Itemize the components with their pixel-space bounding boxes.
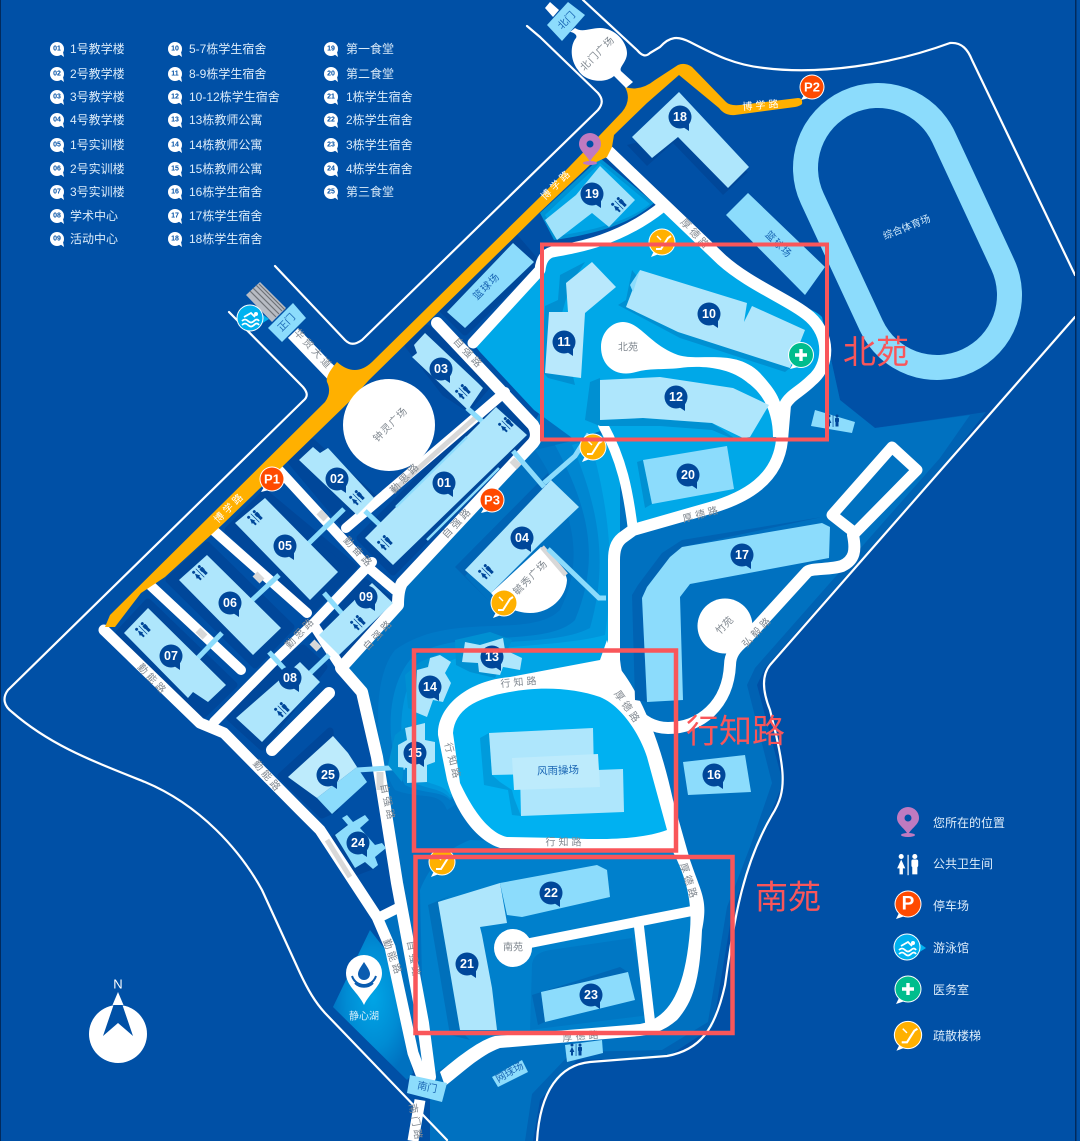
plaza: zhongling bbox=[343, 379, 435, 471]
legend: numbered buildings: 16 bbox=[171, 188, 179, 196]
road: connector between roads bbox=[380, 907, 400, 917]
building 01 bbox=[365, 407, 527, 565]
road: white bar beside 08 bbox=[272, 693, 329, 750]
legend: numbered buildings: 12 bbox=[171, 94, 179, 100]
legend: numbered buildings: 17 bbox=[171, 212, 179, 220]
label bubble 18: 18 bbox=[673, 110, 687, 124]
label bubble 07: 07 bbox=[164, 649, 178, 663]
legend: map symbols: 医务室 bbox=[933, 982, 969, 997]
legend: numbered buildings: 16栋学生宿舍 bbox=[189, 184, 262, 199]
gate: south gate: 南门 bbox=[416, 1079, 438, 1095]
road: qinsi lower bbox=[214, 562, 372, 722]
legend: numbered buildings: 活动中心 bbox=[70, 231, 118, 246]
icon: stairs yuxiu bbox=[490, 590, 518, 618]
panel: court 19 inner bbox=[545, 163, 650, 236]
road: east thin boundary bbox=[537, 317, 1075, 1141]
building 12 bbox=[600, 377, 769, 438]
compass: N bbox=[113, 976, 123, 992]
building: east toilets bbox=[811, 410, 855, 433]
building 03 bbox=[412, 333, 483, 410]
legend: numbered buildings: 24 bbox=[327, 166, 335, 172]
plaza: zhongling: 钟灵广场 bbox=[370, 404, 410, 444]
pad: building 05 bbox=[228, 493, 354, 609]
label bubble 09: 09 bbox=[359, 590, 373, 604]
panel: band between roads bbox=[383, 912, 428, 1075]
road: huamao avenue bbox=[293, 333, 340, 382]
label bubble 21 bbox=[456, 952, 478, 978]
panel: lake ground bbox=[333, 930, 413, 1080]
label bubble 09 bbox=[354, 586, 378, 611]
legend: numbered buildings: 4号教学楼 bbox=[70, 112, 125, 127]
plaza: yuxiu: 毓秀广场 bbox=[510, 557, 550, 597]
icon: parking P3: P3 bbox=[484, 492, 500, 508]
panel: south block ground bbox=[420, 840, 700, 1075]
label bubble 16 bbox=[702, 764, 726, 789]
shadow: rain field hall bbox=[480, 733, 521, 816]
icon: parking P2: P2 bbox=[804, 80, 820, 94]
legend: numbered buildings: 1栋学生宿舍 bbox=[346, 89, 413, 104]
road labels: 自强路 bbox=[378, 782, 398, 823]
legend: numbered buildings: 10 bbox=[171, 46, 179, 52]
legend: map symbols: P bbox=[902, 894, 915, 914]
label bubble 08: 08 bbox=[283, 671, 297, 685]
label bubble 06: 06 bbox=[223, 596, 237, 610]
legend: numbered buildings: 09 bbox=[53, 236, 61, 242]
label bubble 07 bbox=[160, 644, 182, 670]
building 17 bbox=[642, 523, 830, 702]
road: qinsi upper bbox=[346, 392, 505, 528]
building 22 bbox=[500, 865, 610, 917]
label bubble 03: 03 bbox=[434, 362, 448, 376]
panel: ground contour 1 bbox=[378, 430, 620, 810]
road: qinneng road bbox=[104, 630, 422, 1077]
shadow: building 12 bbox=[585, 378, 740, 442]
road: boxue orange road bbox=[105, 64, 802, 627]
legend: numbered buildings: 第二食堂 bbox=[346, 66, 394, 81]
label bubble 05 bbox=[274, 534, 296, 560]
road surface strips bbox=[198, 460, 519, 790]
road: xingzhi ring and houde road bbox=[438, 640, 704, 1086]
pad: building 18 bbox=[627, 132, 748, 195]
legend: numbered buildings: 3号教学楼 bbox=[70, 89, 125, 104]
building: rain field hall: 风雨操场 bbox=[537, 763, 579, 778]
icon: parking P3 bbox=[480, 488, 504, 513]
plaza: north gate: 北门广场 bbox=[577, 33, 617, 73]
gate: main gate bbox=[246, 282, 306, 342]
gate: north gate: 北门 bbox=[555, 9, 578, 32]
legend: numbered buildings: 07 bbox=[53, 188, 61, 196]
court: sports field: 篮球场 bbox=[762, 228, 795, 261]
label bubble 15: 15 bbox=[408, 746, 422, 760]
label bubble 24 bbox=[346, 832, 370, 857]
icon: parking P1 bbox=[260, 466, 284, 492]
road labels: 自强路 bbox=[360, 616, 396, 653]
label bubble 25 bbox=[316, 764, 340, 789]
road: 19 arc bbox=[473, 207, 662, 343]
road labels: 自强路 bbox=[451, 335, 487, 372]
label bubble 16: 16 bbox=[707, 768, 721, 782]
gate: main gate: 正门 bbox=[275, 311, 298, 334]
icon: stairs south bbox=[428, 848, 456, 877]
panel: ground contour 4 bbox=[413, 430, 620, 795]
court: tennis: 网球场 bbox=[493, 1059, 526, 1085]
label bubble 17: 17 bbox=[735, 548, 749, 562]
road: south vertical drive bbox=[638, 918, 651, 1030]
legend: numbered buildings: 2号教学楼 bbox=[70, 66, 125, 81]
legend: numbered buildings: 03 bbox=[53, 94, 61, 100]
label bubble 18 bbox=[668, 106, 692, 131]
label bubble 04: 04 bbox=[515, 531, 529, 545]
building 21 bbox=[438, 883, 507, 1030]
plaza: yuxiu bbox=[491, 547, 567, 613]
shadow: buildings 13 14 15 bbox=[388, 632, 512, 782]
shadow: building 11 bbox=[541, 262, 585, 385]
legend: numbered buildings: 学术中心 bbox=[70, 208, 118, 223]
label bubble 13: 13 bbox=[485, 650, 499, 664]
label bubble 02 bbox=[326, 468, 348, 493]
shadow: building 10 bbox=[618, 270, 790, 372]
legend: numbered buildings: 15栋教师公寓 bbox=[189, 161, 262, 176]
label bubble 17 bbox=[730, 544, 754, 569]
legend: numbered buildings: 08 bbox=[53, 212, 61, 220]
panel: ground around 23 bbox=[530, 938, 650, 1030]
road: south gate road bbox=[413, 1100, 420, 1141]
label bubble 22: 22 bbox=[544, 886, 558, 900]
legend: numbered buildings: 11 bbox=[171, 70, 179, 78]
panel: north court bbox=[473, 207, 829, 530]
icon: lake pin: 静心湖 bbox=[349, 1010, 379, 1022]
callout: south label: 南苑 bbox=[755, 878, 821, 916]
building: rain field hall bbox=[489, 728, 624, 816]
court: basketball bbox=[447, 243, 534, 328]
callout: xingzhi zone box bbox=[414, 650, 676, 850]
building 08 bbox=[236, 662, 320, 742]
legend: numbered buildings: 3栋学生宿舍 bbox=[346, 137, 413, 152]
road surface strip along qinneng bbox=[327, 840, 350, 877]
building 09 bbox=[319, 583, 393, 655]
plaza: nanyuan: 南苑 bbox=[503, 940, 523, 954]
road surface strip along qinsi bbox=[392, 418, 475, 492]
label bubble 19 bbox=[580, 182, 604, 208]
label bubble 23 bbox=[580, 984, 602, 1009]
pad: building 02 bbox=[290, 442, 374, 522]
label bubble 02: 02 bbox=[330, 472, 344, 486]
pad: building 07 bbox=[119, 602, 234, 715]
legend: numbered buildings: 25 bbox=[327, 188, 335, 196]
label bubble 20: 20 bbox=[681, 468, 695, 482]
road labels: 厚德路 bbox=[562, 1028, 602, 1044]
icon: clinic bbox=[788, 342, 814, 369]
building 16 bbox=[683, 755, 751, 795]
label bubble 19: 19 bbox=[585, 187, 599, 201]
label bubble 11: 11 bbox=[557, 335, 571, 349]
road: north thin boundary bbox=[583, 0, 1075, 275]
road labels: 行知路 bbox=[442, 741, 464, 782]
label bubble 24: 24 bbox=[351, 836, 365, 850]
building 10 bbox=[626, 270, 805, 368]
legend: numbered buildings: 3号实训楼 bbox=[70, 184, 125, 199]
label bubble 01: 01 bbox=[437, 476, 451, 490]
road labels: 厚德路 bbox=[677, 861, 701, 902]
plaza: zhuyuan bbox=[698, 598, 752, 654]
panel: ground contour 3 bbox=[401, 430, 620, 798]
building 24 bbox=[335, 815, 386, 869]
building: south toilets bbox=[565, 1040, 603, 1062]
gate: south gate bbox=[407, 1075, 447, 1102]
road labels: 博学路 bbox=[211, 489, 248, 526]
legend: numbered buildings: 5-7栋学生宿舍 bbox=[189, 41, 266, 56]
legend: map symbols bbox=[894, 807, 1005, 1051]
building 06 bbox=[179, 555, 281, 655]
label bubble 21: 21 bbox=[460, 957, 474, 971]
legend: numbered buildings: 06 bbox=[53, 166, 61, 172]
court: basketball: 篮球场 bbox=[470, 270, 503, 303]
legend: numbered buildings: 04 bbox=[53, 116, 61, 124]
building 15 bbox=[398, 723, 435, 783]
legend: numbered buildings: 05 bbox=[53, 142, 61, 148]
legend: numbered buildings: 14栋教师公寓 bbox=[189, 137, 262, 152]
callout: xingzhi label: 行知路 bbox=[686, 712, 785, 750]
road: qinfen road bbox=[278, 469, 395, 590]
pad: building 01 bbox=[360, 402, 530, 572]
road: link to building 12 west bbox=[603, 425, 633, 530]
building 07 bbox=[124, 608, 226, 702]
label bubble 15 bbox=[404, 742, 426, 767]
plaza: beiyuan label: 北苑 bbox=[618, 340, 638, 354]
legend: numbered buildings: 21 bbox=[327, 94, 335, 100]
road: between 05 and 06 bbox=[212, 529, 307, 613]
road labels: 勤能路 bbox=[380, 937, 406, 978]
panel: east campus ground bbox=[341, 300, 986, 1141]
road labels: 厚德路 bbox=[681, 503, 722, 525]
label bubble 01 bbox=[432, 472, 456, 497]
gate: north gate bbox=[547, 2, 585, 41]
legend: numbered buildings: 2栋学生宿舍 bbox=[346, 112, 413, 127]
building 11 bbox=[545, 262, 616, 378]
legend: numbered buildings: 第一食堂 bbox=[346, 41, 394, 56]
icon: swimming pool bbox=[236, 304, 269, 332]
building 20 shadow bbox=[637, 460, 652, 508]
legend: numbered buildings: 02 bbox=[53, 70, 61, 78]
building 13 bbox=[462, 638, 522, 675]
building 14 bbox=[415, 655, 451, 717]
callout: north zone box bbox=[542, 244, 827, 440]
legend: map symbols: 停车场 bbox=[933, 898, 969, 913]
callout: south zone box bbox=[416, 857, 732, 1033]
icon: parking P1: P1 bbox=[264, 472, 280, 486]
pad: building 09 bbox=[316, 582, 394, 658]
pad: building 24 bbox=[335, 828, 372, 872]
road labels: 弘毅路 bbox=[739, 613, 775, 650]
road: beiyuan plaza and drive bbox=[601, 322, 785, 437]
road labels bbox=[135, 97, 782, 1141]
road labels: 勤能路 bbox=[135, 661, 171, 698]
building 20 bbox=[643, 446, 734, 504]
building 17 shadow bbox=[632, 517, 822, 702]
label bubble 05: 05 bbox=[278, 539, 292, 553]
plaza: zhuyuan: 竹苑 bbox=[713, 614, 736, 637]
legend: numbered buildings: 17栋学生宿舍 bbox=[189, 208, 262, 223]
plaza: nanyuan bbox=[494, 929, 532, 967]
legend: numbered buildings: 01 bbox=[53, 46, 61, 52]
legend: numbered buildings: 14 bbox=[171, 142, 179, 148]
pad: building 08 bbox=[230, 648, 324, 747]
road: ziqiang road bbox=[341, 323, 536, 1077]
athletic track bbox=[878, 168, 937, 295]
pad: building 06 bbox=[169, 545, 291, 665]
road: ring interior bbox=[453, 689, 667, 839]
road labels: 勤思路 bbox=[282, 614, 318, 651]
panel: ground contour 2 bbox=[391, 430, 620, 800]
building 23 bbox=[541, 972, 635, 1022]
building 25 bbox=[288, 736, 367, 814]
road labels: 自强路 bbox=[404, 939, 424, 980]
link bridges bbox=[195, 408, 606, 770]
label bubble 23: 23 bbox=[584, 988, 598, 1002]
legend: numbered buildings: 20 bbox=[327, 70, 335, 78]
label bubble 08 bbox=[278, 666, 302, 692]
road: north gate stub bbox=[545, 2, 559, 17]
pad: basketball court bbox=[443, 235, 536, 332]
label bubble 25: 25 bbox=[321, 768, 335, 782]
legend: numbered buildings: 13 bbox=[171, 116, 179, 124]
legend: numbered buildings: 18 bbox=[171, 236, 179, 242]
road labels: 华贸大道 bbox=[291, 326, 336, 373]
building 18 bbox=[632, 92, 749, 188]
legend: numbered buildings: 18栋学生宿舍 bbox=[189, 231, 262, 246]
legend: numbered buildings: 15 bbox=[171, 166, 179, 172]
label bubble 12: 12 bbox=[669, 390, 683, 404]
road labels: 厚德路 bbox=[611, 688, 644, 727]
legend: numbered buildings bbox=[50, 41, 413, 247]
building 19 bbox=[545, 166, 635, 240]
label bubble 11 bbox=[552, 330, 576, 356]
plaza: north gate bbox=[570, 28, 633, 88]
icon: parking P2 bbox=[800, 74, 824, 100]
icon: lake pin bbox=[346, 955, 382, 1022]
road: hongyi loop bbox=[832, 447, 917, 533]
label bubble 12 bbox=[664, 386, 688, 411]
road labels: 厚德路 bbox=[678, 216, 714, 253]
legend: map symbols: 公共卫生间 bbox=[933, 857, 993, 871]
legend: numbered buildings: 8-9栋学生宿舍 bbox=[189, 66, 266, 81]
shadow: building 21 bbox=[428, 895, 470, 1040]
legend: map symbols: 您所在的位置 bbox=[933, 815, 1005, 830]
legend: numbered buildings: 22 bbox=[327, 116, 335, 124]
toilet icons on buildings bbox=[134, 196, 627, 719]
pad: building 25 bbox=[281, 731, 335, 815]
icon: location pin bbox=[579, 133, 601, 165]
legend: map symbols: 疏散楼梯 bbox=[933, 1028, 981, 1043]
road labels: 勤奋路 bbox=[341, 534, 377, 571]
pad: building 03 bbox=[408, 328, 488, 408]
legend: numbered buildings: 1号实训楼 bbox=[70, 137, 125, 152]
pad: building 04 bbox=[455, 473, 551, 602]
road labels: 博学路 bbox=[742, 97, 782, 113]
label bubble 04 bbox=[510, 526, 534, 552]
legend: map symbols: 游泳馆 bbox=[933, 940, 969, 955]
athletic track: 综合体育场 bbox=[881, 212, 932, 242]
legend: numbered buildings: 13栋教师公寓 bbox=[189, 112, 262, 127]
label bubble 06 bbox=[218, 592, 242, 617]
road labels: 行知路 bbox=[500, 674, 540, 690]
label bubble 14: 14 bbox=[423, 680, 437, 694]
label bubble 22 bbox=[540, 882, 562, 907]
legend: numbered buildings: 10-12栋学生宿舍 bbox=[189, 89, 280, 104]
callout: north label: 北苑 bbox=[843, 334, 909, 370]
road: link to 08 junction bbox=[313, 624, 341, 667]
icon: stairs north bbox=[648, 228, 676, 257]
legend: numbered buildings: 23 bbox=[327, 142, 335, 148]
legend: numbered buildings: 4栋学生宿舍 bbox=[346, 161, 413, 176]
label bubble 13 bbox=[480, 646, 504, 671]
label bubble 20 bbox=[676, 464, 700, 489]
label bubble 10 bbox=[698, 302, 720, 328]
label bubble 14 bbox=[418, 676, 442, 701]
legend: numbered buildings: 2号实训楼 bbox=[70, 161, 125, 176]
road: west thin boundary bbox=[5, 312, 447, 1140]
panel: court 19 bbox=[540, 158, 654, 240]
road: houde road north bbox=[609, 152, 854, 728]
road labels: 勤能路 bbox=[250, 757, 285, 795]
building 04 bbox=[465, 480, 579, 593]
court: sports field bbox=[726, 193, 825, 295]
building 02 bbox=[299, 447, 374, 515]
road labels: 博学路 bbox=[538, 166, 575, 203]
road: NW thin boundary bbox=[275, 26, 602, 344]
icon: stairs middle bbox=[580, 434, 606, 462]
shadow: building 23 bbox=[532, 967, 628, 1025]
road labels: 行知路 bbox=[546, 836, 584, 848]
road labels: 勤思路 bbox=[387, 459, 423, 496]
road labels: 自强路 bbox=[439, 504, 475, 541]
legend: numbered buildings: 第三食堂 bbox=[346, 184, 394, 199]
label bubble 03 bbox=[430, 358, 452, 383]
compass bbox=[89, 976, 147, 1063]
legend: numbered buildings: 1号教学楼 bbox=[70, 41, 125, 56]
label bubble 10: 10 bbox=[702, 307, 716, 321]
building 05 bbox=[235, 498, 338, 600]
road: between 06 and 07 bbox=[150, 585, 241, 670]
legend: numbered buildings: 19 bbox=[327, 46, 335, 52]
panel: east campus inner ground bbox=[341, 300, 970, 1141]
road: south top drive bbox=[515, 911, 692, 946]
